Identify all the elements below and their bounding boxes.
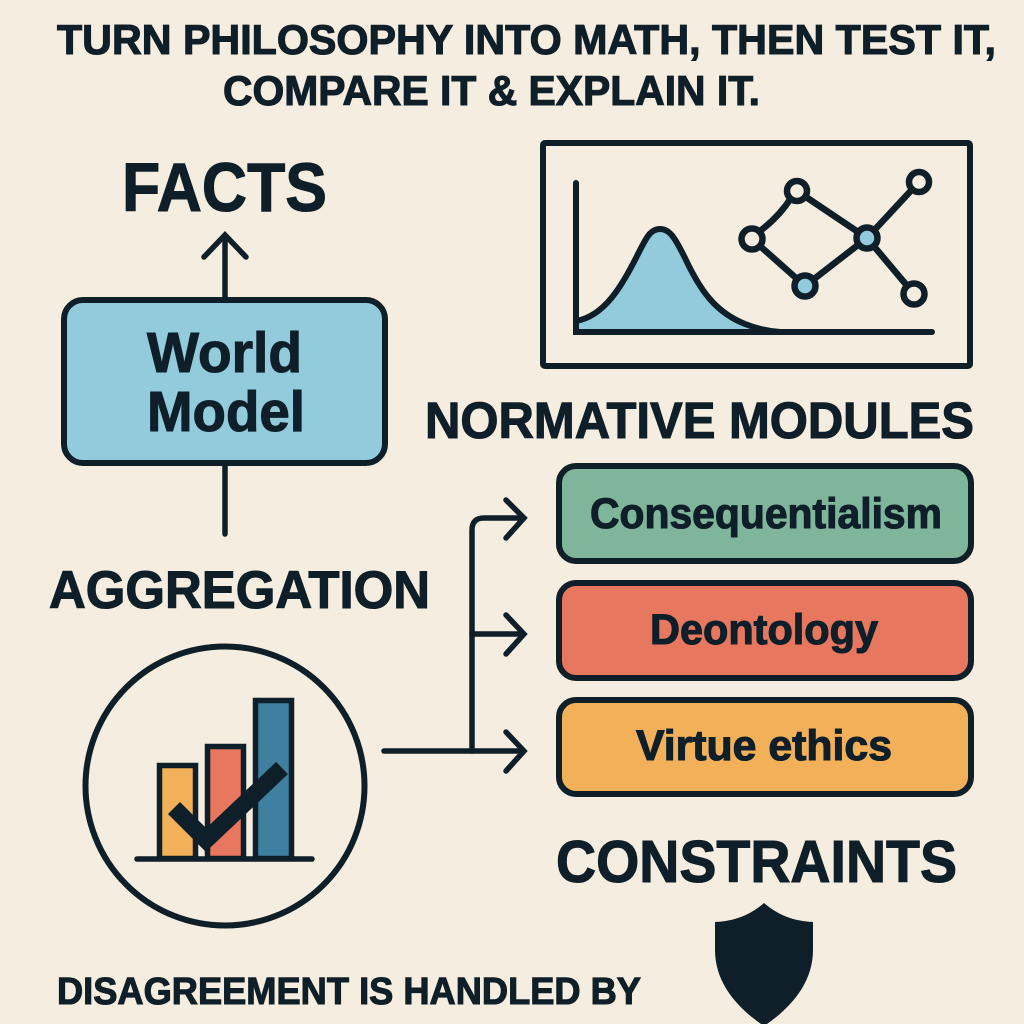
title: COMPARE IT & EXPLAIN IT. [223, 67, 760, 114]
panel: world model: World [147, 321, 302, 385]
heading: normative modules: NORMATIVE MODULES [425, 392, 974, 449]
chart panel: distribution and graph [543, 143, 970, 366]
heading: constraints: CONSTRAINTS [556, 829, 957, 895]
title: TURN PHILOSOPHY INTO MATH, THEN TEST IT, [57, 16, 996, 63]
arrow: world model up to facts [204, 235, 246, 297]
panel: deontology: Deontology [650, 606, 878, 654]
heading: aggregation: AGGREGATION [49, 561, 430, 620]
panel: virtue ethics: Virtue ethics [636, 722, 892, 770]
panel: virtue ethics [559, 700, 971, 794]
title [57, 16, 996, 114]
arrows: aggregation branching to modules [384, 500, 524, 771]
icon: shield [715, 903, 813, 1024]
panel: deontology [559, 583, 971, 678]
distribution curve [576, 183, 932, 332]
panel: consequentialism: Consequentialism [590, 490, 942, 538]
icon: bar chart with check in circle [86, 646, 364, 926]
node network [742, 172, 929, 304]
text: disagreement line: DISAGREEMENT IS HANDLED BY [57, 971, 641, 1013]
heading: facts: FACTS [122, 149, 327, 226]
panel: world model [64, 300, 385, 463]
connector: aggregation up to world model [222, 466, 228, 534]
panel: world model: Model [147, 380, 305, 444]
panel: consequentialism [559, 466, 971, 561]
